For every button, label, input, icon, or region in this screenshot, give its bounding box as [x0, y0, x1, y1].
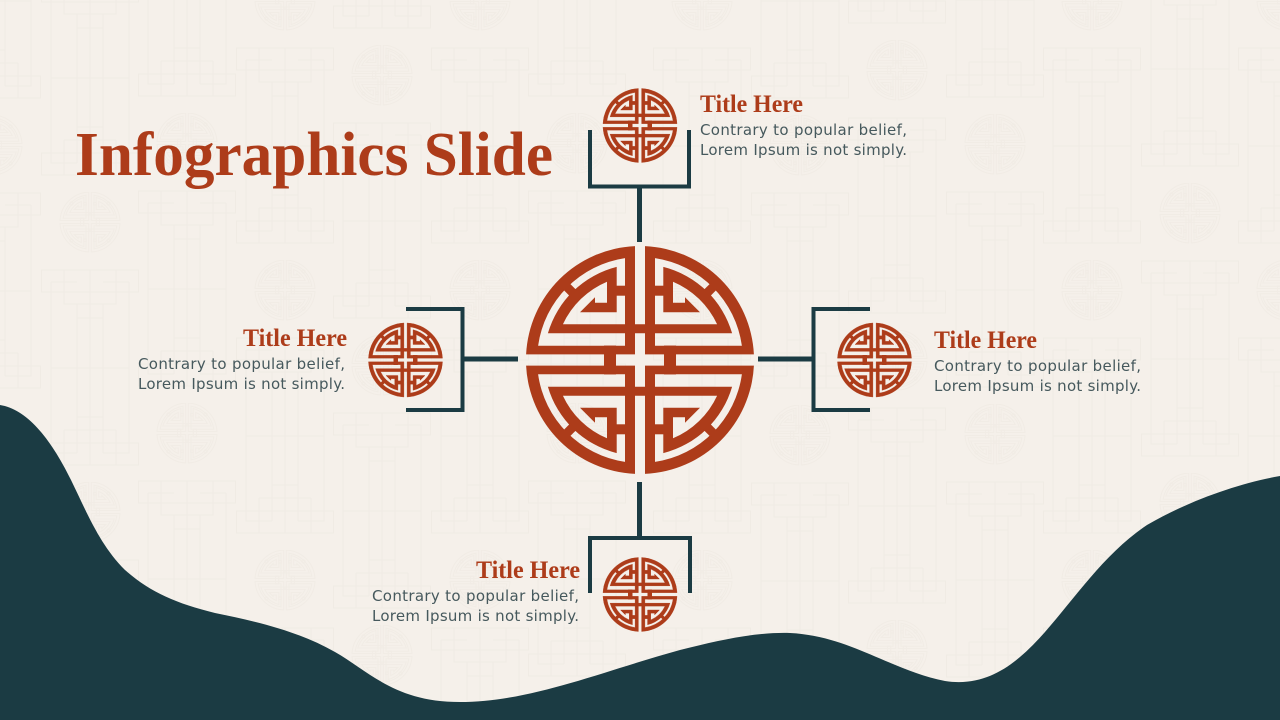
text block: top [700, 91, 907, 159]
text block: right [934, 327, 1141, 395]
text block: right: Contrary to popular belief, [934, 357, 1141, 375]
text block: top: Lorem Ipsum is not simply. [700, 141, 907, 159]
text block: top: Contrary to popular belief, [700, 121, 907, 139]
connector: bottom [590, 482, 690, 593]
text block: top: Title Here [700, 91, 803, 118]
title: Infographics Slide [75, 121, 553, 189]
central emblem [526, 246, 754, 474]
connector: top [590, 130, 689, 242]
text block: left [138, 325, 347, 393]
text block: bottom: Title Here [476, 557, 580, 584]
text block: left: Contrary to popular belief, [138, 355, 345, 373]
text block: left: Lorem Ipsum is not simply. [138, 375, 345, 393]
text block: right: Title Here [934, 327, 1037, 354]
text block: bottom: Contrary to popular belief, [372, 587, 579, 605]
icon: bottom emblem [603, 557, 677, 632]
text block: bottom [372, 557, 580, 625]
text block: bottom: Lorem Ipsum is not simply. [372, 607, 579, 625]
text block: left: Title Here [243, 325, 347, 352]
connector: right [758, 309, 870, 410]
icon: top emblem [603, 88, 677, 163]
icon: right emblem [837, 323, 912, 397]
connector: left [406, 309, 518, 410]
dark wave at the bottom [0, 405, 1280, 720]
text block: right: Lorem Ipsum is not simply. [934, 377, 1141, 395]
icon: left emblem [368, 323, 443, 397]
